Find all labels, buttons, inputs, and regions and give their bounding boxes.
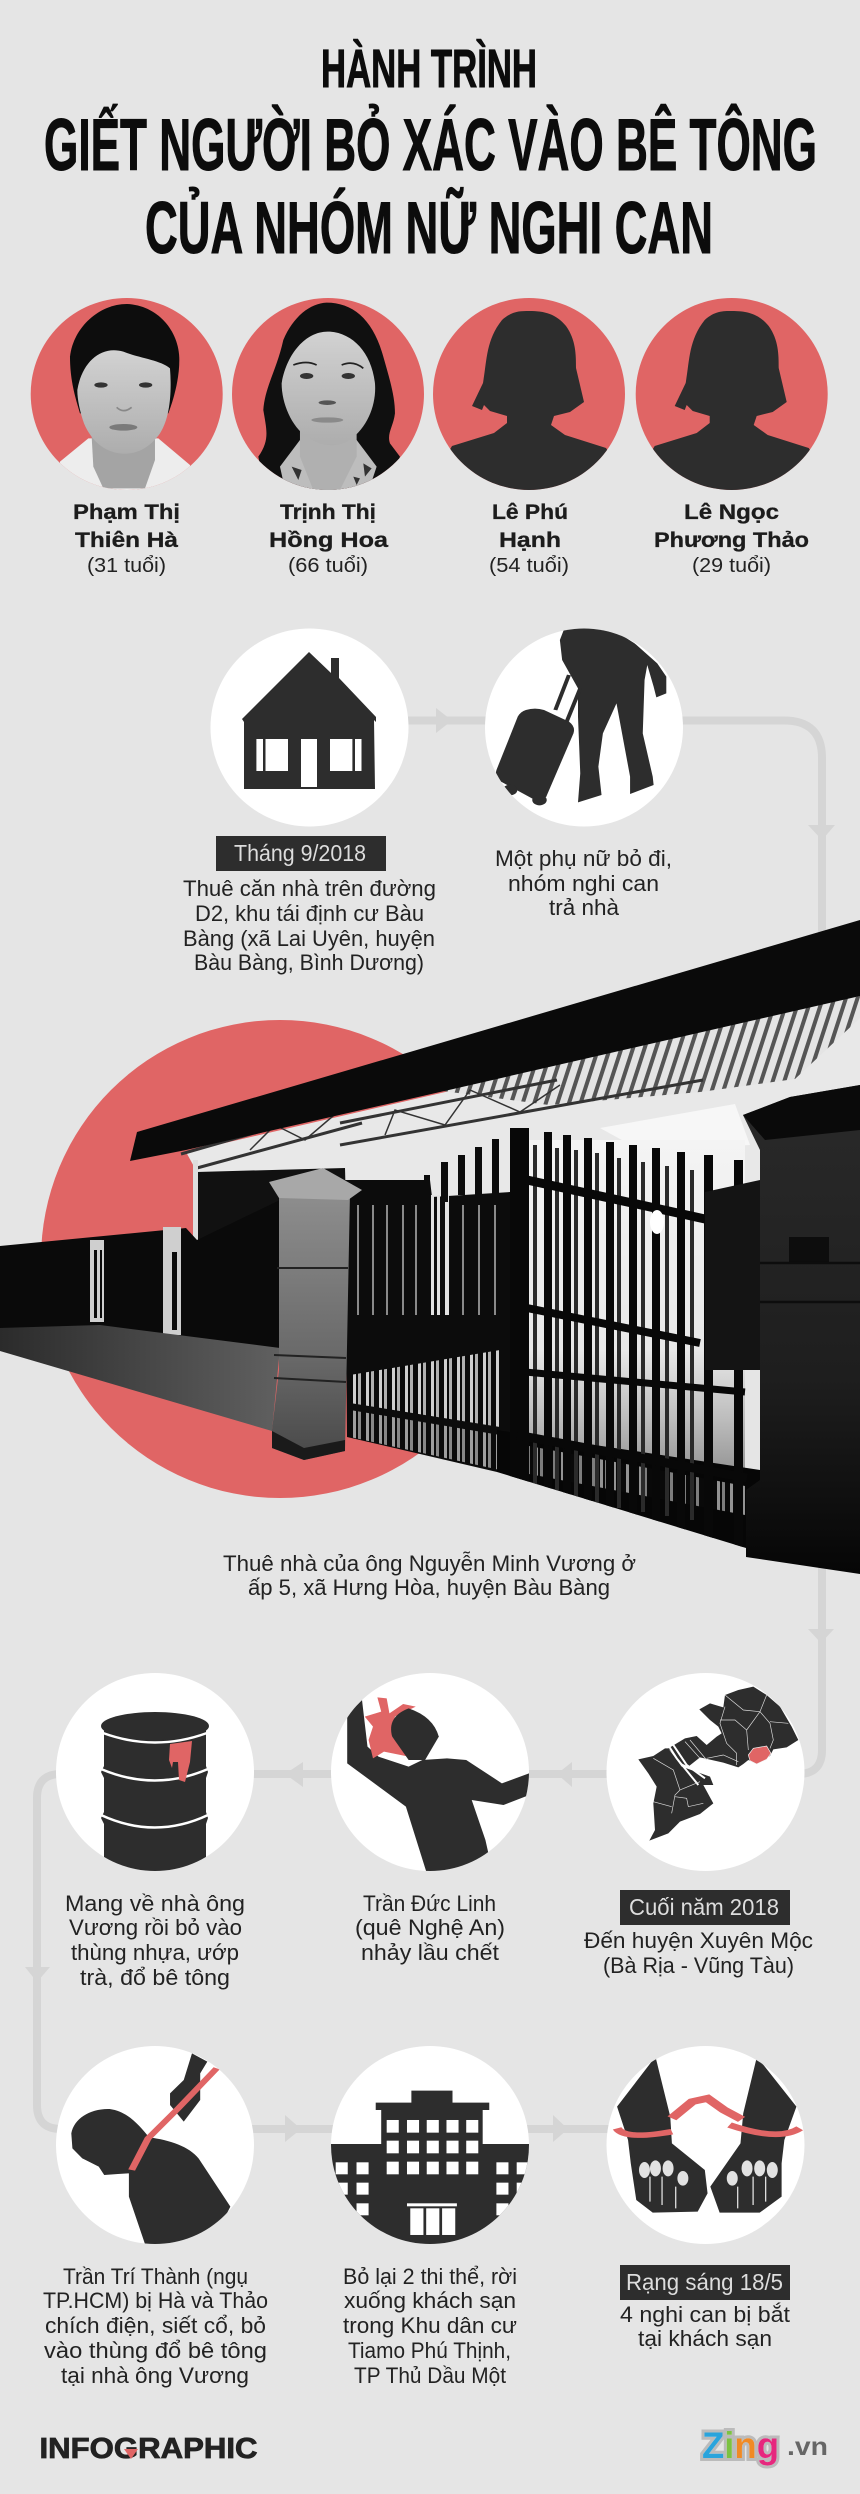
title — [44, 39, 817, 269]
text: hotel: Bỏ lại 2 thi thể, rời — [343, 2264, 517, 2289]
text: Xuyên Mộc: (Bà Rịa - Vũng Tàu) — [603, 1953, 794, 1978]
text: woman leaves: nhóm nghi can — [508, 871, 659, 896]
suspect names and ages: Trịnh Thị — [280, 501, 376, 524]
gate left leaf spikes — [424, 1139, 499, 1205]
text: rented house: Thuê căn nhà trên đường — [183, 876, 436, 901]
text: arrest: tại khách sạn — [638, 2326, 772, 2351]
suspect names and ages: (66 tuổi) — [288, 555, 368, 577]
footer: Zing.vn logo: .vn — [787, 2433, 828, 2461]
left fence — [0, 1200, 280, 1350]
text: woman leaves: Một phụ nữ bỏ đi, — [495, 846, 672, 871]
text: barrel: trà, đổ bê tông — [80, 1965, 230, 1990]
footer: Zing.vn logo: Zing — [702, 2425, 779, 2466]
text: Xuyên Mộc — [584, 1928, 813, 1978]
gate left leaf — [345, 1130, 529, 1472]
text: hotel: xuống khách sạn — [344, 2288, 516, 2313]
text: rented house: D2, khu tái định cư Bàu — [195, 901, 424, 926]
text: barrel: Vương rồi bỏ vào — [69, 1915, 242, 1940]
step: hotel — [331, 2046, 529, 2250]
footer: INFOGRAPHIC wordmark: INFOGRAPHIC — [40, 2433, 258, 2465]
text: strangled man: vào thùng đổ bê tông — [44, 2338, 267, 2363]
text: barrel: thùng nhựa, ướp — [71, 1940, 239, 1965]
text: strangled man: chích điện, siết cổ, bỏ — [45, 2313, 266, 2338]
suspect names and ages: Phạm Thị — [73, 501, 180, 524]
step: barrel — [56, 1673, 254, 1880]
lit ceiling — [186, 996, 860, 1260]
footer: Zing.vn logo: Zing — [702, 2425, 779, 2466]
big red circle — [41, 1020, 519, 1498]
label: Cuối năm 2018: Cuối năm 2018 — [629, 1894, 779, 1920]
icon: barrel — [101, 1712, 209, 1880]
suspect names and ages: (54 tuổi) — [489, 555, 569, 577]
suspect silhouette: Lê Phú Hạnh — [433, 298, 625, 490]
lit yard behind gate — [529, 1140, 745, 1490]
text: hotel: TP Thủ Dầu Một — [354, 2363, 506, 2388]
text: strangled man: tại nhà ông Vương — [61, 2363, 249, 2388]
label: Tháng 9/2018 — [216, 836, 386, 871]
right pillar — [743, 1085, 860, 1574]
text: gate caption — [223, 1551, 636, 1600]
suspect names and ages: Hạnh — [499, 529, 561, 552]
suspect names and ages: Lê Phú — [492, 501, 568, 524]
step: rented house — [210, 628, 408, 826]
step: arrest — [606, 2046, 804, 2244]
text: woman leaves: trả nhà — [549, 895, 620, 920]
text: man jumps — [355, 1891, 505, 1965]
icon: house — [242, 652, 376, 789]
text: man jumps: Trần Đức Linh — [363, 1891, 496, 1916]
text: strangled man: Trần Trí Thành (ngụ — [63, 2264, 248, 2289]
step: map of southern Vietnam — [606, 1673, 804, 1871]
suspect portrait: Trịnh Thị Hồng Hoa — [232, 298, 424, 497]
gate posts and bars — [510, 1128, 743, 1550]
icon: strangled man — [71, 2053, 230, 2250]
text: strangled man — [43, 2264, 268, 2388]
suspect names and ages: Hồng Hoa — [269, 529, 388, 552]
text: barrel: Mang về nhà ông — [65, 1891, 245, 1916]
icon: falling man with blood — [347, 1697, 529, 1877]
panel: suspects — [31, 298, 843, 577]
right dark section of gate — [705, 1180, 760, 1370]
foliage behind fence — [197, 1168, 350, 1360]
right leaf lower slats and bottom band — [497, 1430, 760, 1555]
suspect silhouette: Lê Ngọc Phương Thảo — [636, 298, 828, 490]
step: woman leaves — [485, 623, 683, 826]
text: hotel: Tiamo Phú Thịnh, — [348, 2338, 511, 2363]
arrowheads — [25, 708, 835, 2142]
suspect names and ages — [73, 501, 809, 577]
step: strangled man — [56, 2046, 254, 2250]
roof — [130, 920, 860, 1161]
gate left leaf lower slats — [350, 1350, 500, 1470]
text: gate caption: ấp 5, xã Hưng Hòa, huyện Bàu Bàng — [248, 1575, 610, 1600]
lamp glare — [650, 1210, 664, 1234]
text: barrel — [65, 1891, 245, 1990]
footer: Zing.vn logo — [702, 2425, 828, 2466]
text: gate caption: Thuê nhà của ông Nguyễn Minh Vương ở — [223, 1551, 636, 1576]
label: Tháng 9/2018: Tháng 9/2018 — [234, 840, 366, 866]
left wall — [0, 1325, 280, 1431]
text: hotel — [343, 2264, 517, 2388]
text: rented house: Bàng (xã Lai Uyên, huyện — [183, 926, 435, 951]
suspect names and ages: Lê Ngọc — [684, 501, 779, 524]
text: arrest — [620, 2302, 790, 2351]
text: rented house — [183, 876, 436, 975]
suspect names and ages: (31 tuổi) — [87, 555, 166, 577]
text: arrest: 4 nghi can bị bắt — [620, 2302, 790, 2327]
text: woman leaves — [495, 846, 672, 920]
suspect names and ages: Thiên Hà — [75, 529, 178, 552]
text: rented house: Bàu Bàng, Bình Dương) — [194, 950, 424, 975]
text: man jumps: nhảy lầu chết — [361, 1940, 499, 1965]
icon: map — [638, 1687, 798, 1841]
text: strangled man: TP.HCM) bị Hà và Thảo — [43, 2288, 268, 2313]
suspect portrait: Phạm Thị Thiên Hà — [31, 298, 223, 503]
connector path — [37, 720, 822, 2129]
label: Cuối năm 2018 — [620, 1890, 790, 1925]
text: hotel: trong Khu dân cư — [343, 2313, 517, 2338]
title: HÀNH TRÌNH — [321, 39, 537, 99]
suspect names and ages: Phương Thảo — [654, 529, 809, 552]
text: man jumps: (quê Nghệ An) — [355, 1915, 505, 1940]
photo: house gate at night — [0, 920, 860, 1574]
center pillar — [272, 1192, 350, 1460]
text: Xuyên Mộc: Đến huyện Xuyên Mộc — [584, 1928, 813, 1953]
suspect names and ages: (29 tuổi) — [692, 555, 771, 577]
label: Rạng sáng 18/5: Rạng sáng 18/5 — [626, 2269, 783, 2295]
icon: traveller with suitcase — [496, 623, 666, 805]
step: man jumps — [331, 1673, 529, 1877]
gate rails — [517, 1180, 747, 1478]
icon: hotel — [331, 2091, 529, 2250]
icon: handcuffed hands — [617, 2057, 800, 2213]
